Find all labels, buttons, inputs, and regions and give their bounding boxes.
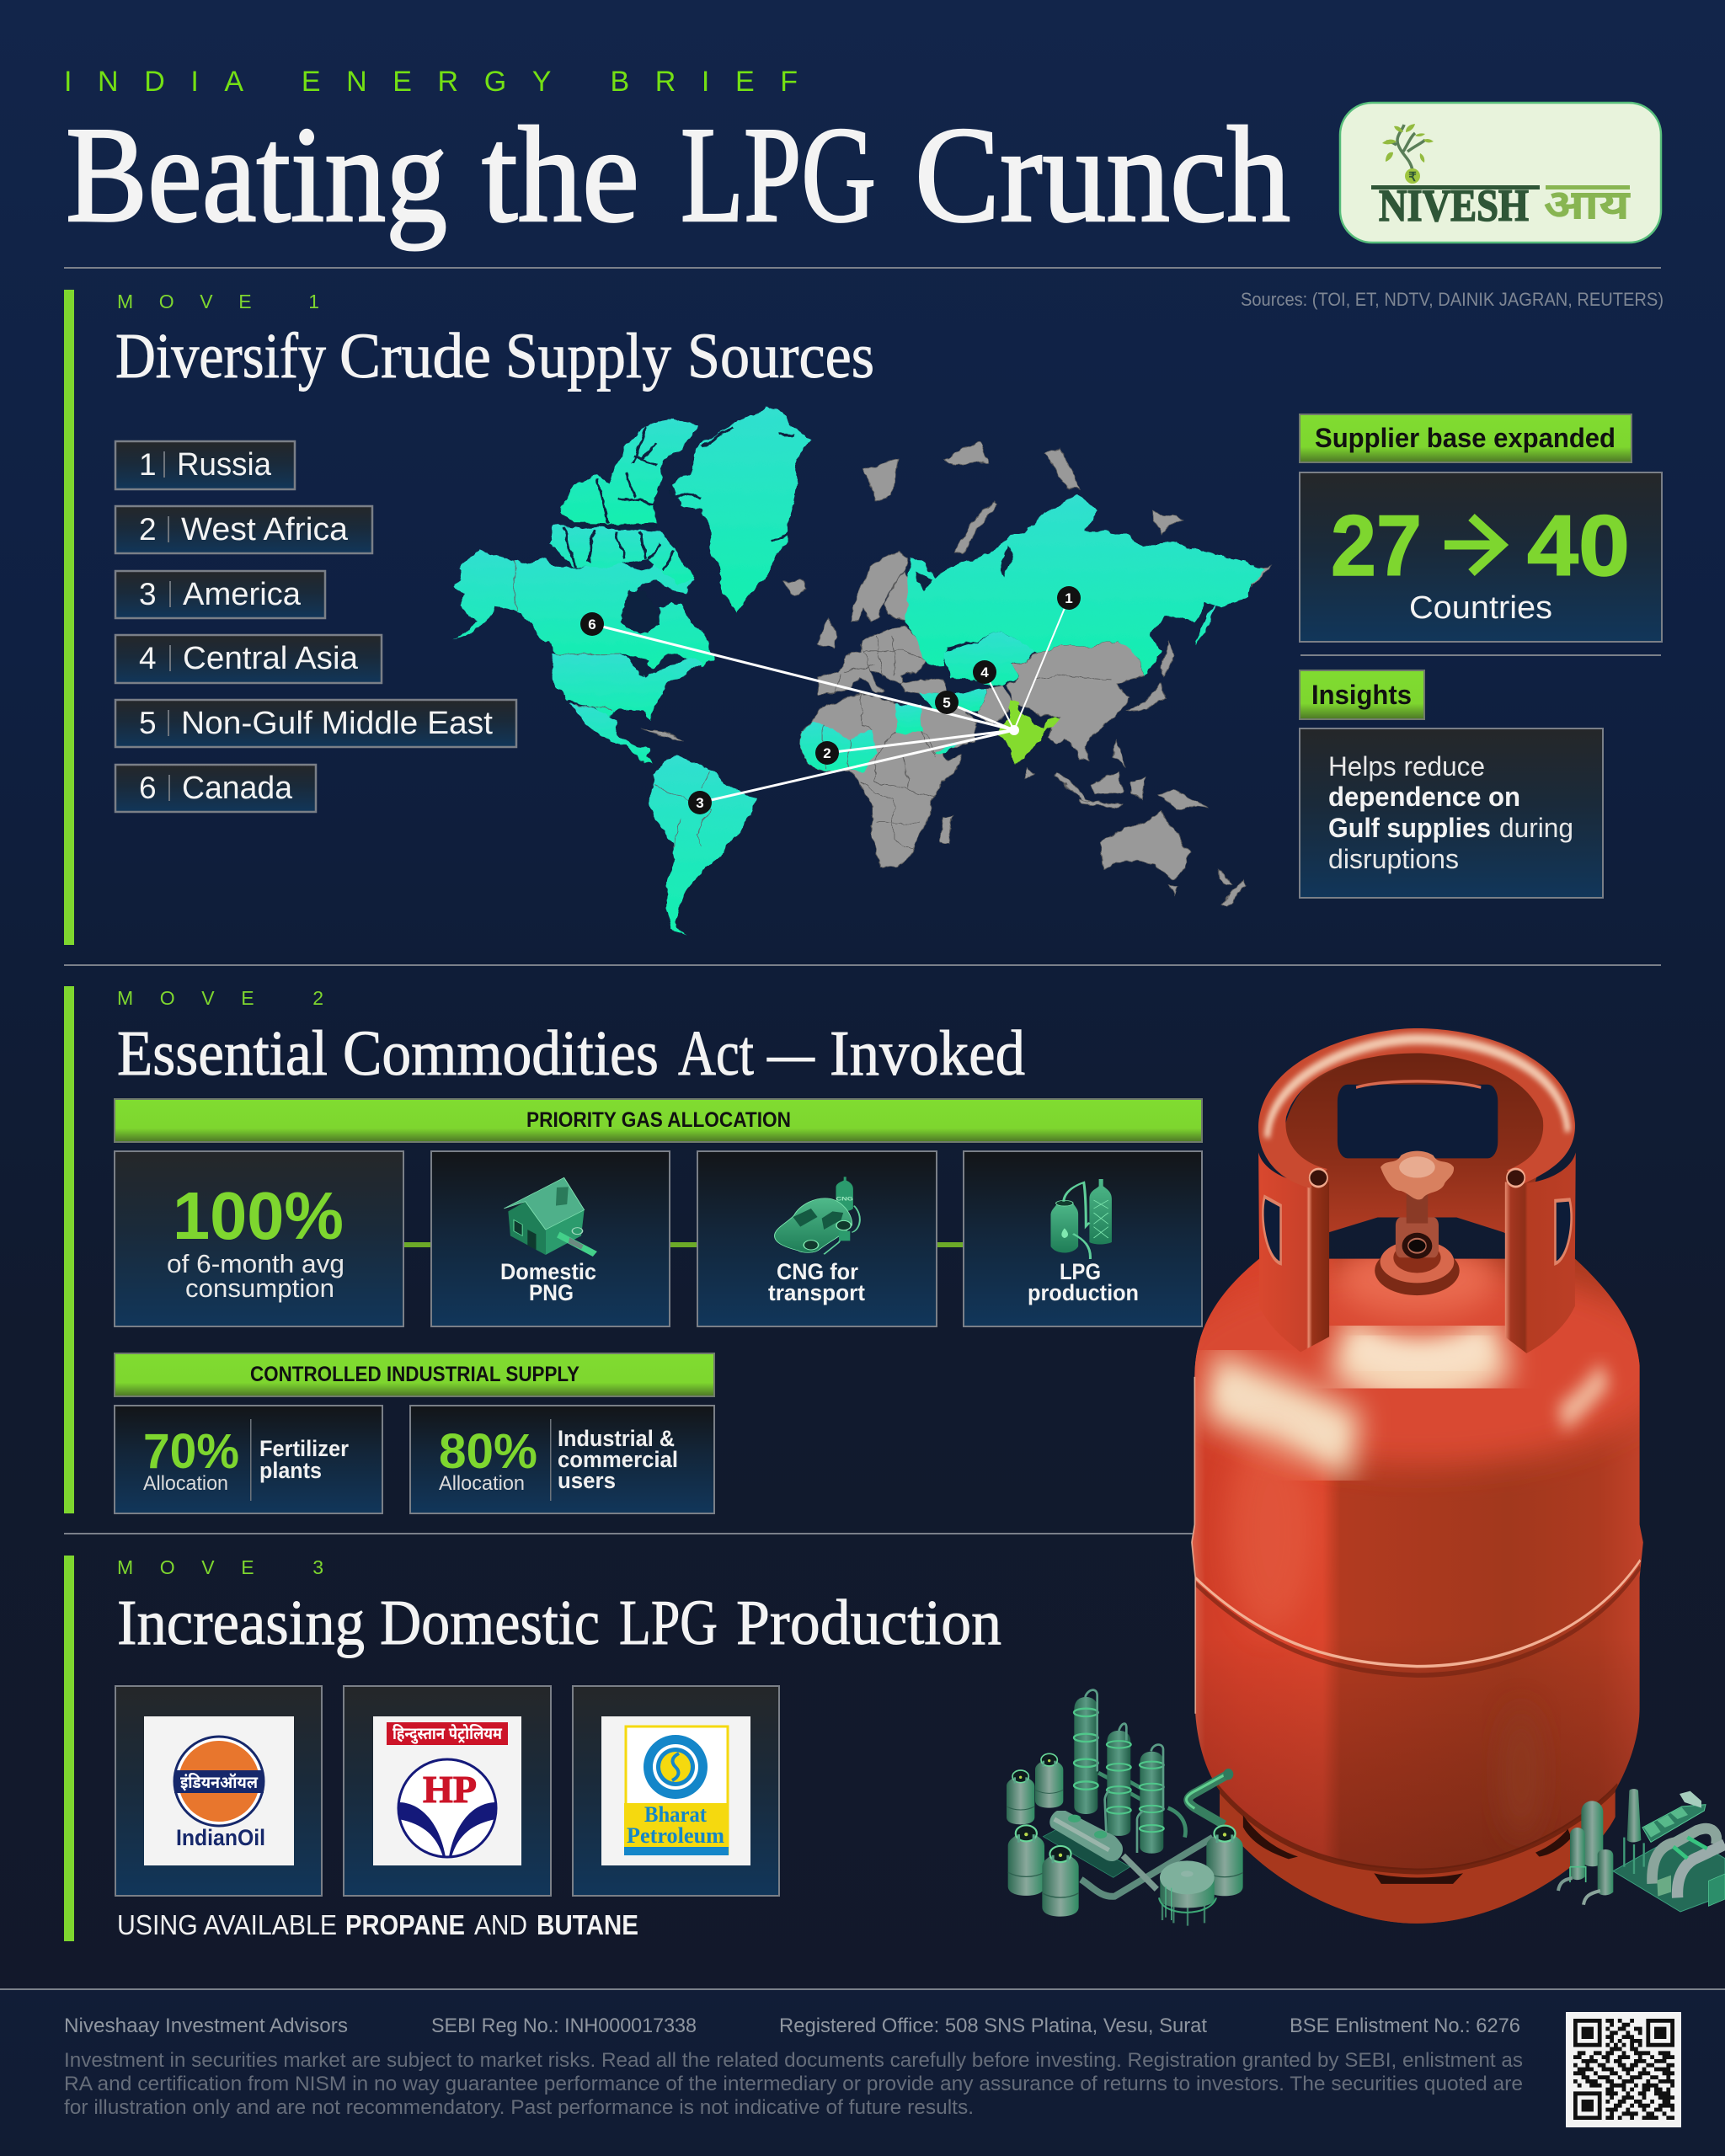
propane and butane note: BUTANE (537, 1909, 638, 1940)
node 4 (973, 660, 996, 684)
list item: Non-Gulf Middle East (115, 700, 516, 747)
card: 70 percent: Allocation (143, 1472, 228, 1495)
cylinder handle collar (1258, 1028, 1576, 1353)
node 6: 6 (588, 616, 596, 632)
move 3 heading: Production (736, 1588, 1001, 1658)
supplier base tag (1300, 414, 1632, 462)
node 3: 3 (696, 795, 704, 811)
card: 70 percent: 70% (143, 1424, 239, 1479)
footer disclaimer (64, 2049, 1523, 2119)
list item: West Africa (115, 506, 372, 553)
controlled supply banner: CONTROLLED INDUSTRIAL SUPPLY (250, 1363, 579, 1386)
footer details: Registered Office: 508 SNS Platina, Vesu, Surat (779, 2015, 1207, 2037)
insights card: Helps reduce (1328, 751, 1485, 782)
move 3 label: MOVE 3 (117, 1556, 323, 1578)
insights card: disruptions (1328, 844, 1459, 874)
insights card: during (1499, 813, 1573, 843)
main title: the (482, 99, 639, 251)
card: 70 percent: plants (259, 1458, 322, 1483)
footer disclaimer: for illustration only and are not recommendatory. Past performance is not indicative of future results. (64, 2096, 974, 2119)
logo wordmark: NIVESH (1379, 180, 1529, 231)
card: 70 percent (115, 1406, 382, 1513)
move 3 heading: LPG (619, 1588, 718, 1658)
controlled supply banner (115, 1353, 714, 1396)
move 3 heading: Domestic (380, 1588, 600, 1658)
card: 100 percent (115, 1151, 403, 1326)
route lines (592, 598, 1069, 803)
LPG cylinder illustration (1191, 1028, 1643, 1924)
move 3 heading: Increasing (117, 1588, 365, 1658)
card: 80 percent (410, 1406, 714, 1513)
priority banner (115, 1099, 1202, 1142)
list item: Canada: 6 (139, 771, 157, 805)
card: 80 percent: commercial (558, 1447, 678, 1472)
card: LPG production (964, 1151, 1202, 1326)
list item: West Africa: West Africa (181, 512, 349, 547)
list item: Canada (115, 765, 316, 812)
card: domestic PNG: Domestic (500, 1259, 596, 1284)
list item: Non-Gulf Middle East: Non-Gulf Middle East (181, 706, 493, 741)
list item: West Africa: 2 (139, 512, 157, 547)
panel: move 3 (64, 1556, 1001, 1941)
card: HP logo: HP (423, 1768, 477, 1811)
node 5: 5 (943, 695, 951, 711)
panel: move 2 (64, 986, 1202, 1513)
list item: America (115, 571, 325, 618)
propane and butane note: AND (474, 1909, 527, 1940)
node 4: 4 (980, 664, 989, 680)
insights card: Gulf supplies (1328, 813, 1491, 843)
footer details: BSE Enlistment No.: 6276 (1290, 2015, 1520, 2037)
list item: America: America (183, 577, 302, 612)
list item: America: 3 (139, 577, 157, 611)
list item: Russia: 1 (139, 447, 157, 482)
move 2 heading: Essential (117, 1018, 328, 1089)
QR code (1566, 2012, 1681, 2127)
move 3 heading (117, 1588, 1001, 1658)
card: CNG for transport: CNG for (777, 1259, 858, 1284)
footer details: Niveshaay Investment Advisors (64, 2015, 348, 2037)
node 1: 1 (1065, 590, 1073, 606)
footer background (0, 1989, 1725, 2156)
supplier count card: Countries (1409, 590, 1552, 626)
footer details: SEBI Reg No.: INH000017338 (431, 2015, 697, 2037)
card: 100 percent: 100% (173, 1178, 344, 1253)
card: LPG production: LPG (1060, 1259, 1101, 1284)
move 1 heading: Diversify (115, 321, 326, 392)
Niveshaay logo badge (1340, 103, 1661, 243)
move 1 heading (115, 321, 874, 392)
card: 80 percent: 80% (439, 1424, 537, 1479)
move 2 heading: Invoked (830, 1018, 1025, 1089)
cylinder valve (1375, 1151, 1460, 1295)
card: Bharat Petroleum logo (573, 1686, 779, 1896)
insights tag (1300, 670, 1424, 719)
supplier list (115, 441, 516, 812)
card: IndianOil logo (115, 1686, 322, 1896)
logo Hindi wordmark: आय (1543, 181, 1631, 228)
supplier count card: 27 (1331, 498, 1422, 594)
move 2 heading: Act (678, 1018, 754, 1089)
node 1 (1057, 586, 1081, 610)
card: domestic PNG (431, 1151, 670, 1326)
main title (66, 99, 1290, 251)
card: IndianOil logo: इंडियनऑयल (180, 1772, 259, 1792)
country borders (832, 636, 1112, 847)
icon: car and CNG tank: CNG (836, 1196, 853, 1202)
card: HP logo: हिन्दुस्तान पेट्रोलियम (393, 1723, 503, 1744)
card: domestic PNG: PNG (529, 1280, 574, 1305)
supplier count card (1300, 472, 1662, 642)
sources: Sources: (TOI, ET, NDTV, DAINIK JAGRAN, REUTERS) (1241, 289, 1664, 310)
list item: Non-Gulf Middle East: 5 (139, 706, 157, 740)
card: 70 percent: Fertilizer (259, 1436, 349, 1461)
icon: car and CNG tank (775, 1177, 860, 1254)
origin point (1009, 725, 1019, 735)
list item: Russia (115, 441, 295, 489)
connectors (403, 1242, 964, 1247)
move 2 label: MOVE 2 (117, 987, 323, 1009)
node 3 (688, 791, 712, 814)
logo tree: ₹ (1408, 170, 1417, 184)
card: IndianOil logo: IndianOil (176, 1825, 265, 1850)
list item: Russia: Russia (177, 447, 272, 483)
panel: move 1 (64, 289, 1664, 945)
card: 80 percent: Allocation (439, 1472, 525, 1495)
footer disclaimer: Investment in securities market are subject to market risks. Read all the related documents carefully before investing. Registration granted by SEBI, enlistment as (64, 2049, 1523, 2072)
main title: LPG (681, 99, 876, 251)
India (997, 700, 1060, 766)
list item: Canada: Canada (182, 771, 293, 806)
card: CNG for transport: transport (768, 1280, 865, 1305)
list item: Central Asia: 4 (139, 641, 157, 675)
move 1 heading: Supply (505, 321, 671, 392)
move 2 heading (117, 1018, 1025, 1089)
list item: Central Asia: Central Asia (183, 641, 359, 676)
move 1 label: MOVE 1 (117, 291, 319, 312)
card: 80 percent: Industrial & (558, 1426, 675, 1451)
node 2 (815, 741, 839, 765)
footer disclaimer: RA and certification from NISM in no way guarantee performance of the intermediary or provide any assurance of returns to investors. The securities quoted are (64, 2073, 1523, 2095)
highlighted supplier regions (453, 407, 1265, 935)
card: Bharat Petroleum logo: Bharat (644, 1802, 707, 1827)
insights card (1300, 728, 1603, 898)
move 2 heading: — (766, 1018, 815, 1089)
card: 100 percent: of 6-month avg (167, 1249, 344, 1278)
card: HP logo (344, 1686, 551, 1896)
refinery illustration right (1558, 1789, 1725, 1912)
cylinder body (1191, 1258, 1643, 1924)
logo tree (1382, 124, 1434, 184)
card: LPG production: production (1028, 1280, 1139, 1305)
refinery illustration left (1007, 1690, 1243, 1926)
main title: Beating (66, 99, 447, 251)
node 2: 2 (823, 745, 831, 761)
list item: Central Asia (115, 635, 382, 683)
supplier base tag: Supplier base expanded (1315, 423, 1616, 453)
supplier count card: 40 (1527, 498, 1630, 594)
propane and butane note: USING AVAILABLE (117, 1909, 337, 1940)
icon: house with pipe (504, 1177, 597, 1257)
propane and butane note (117, 1909, 638, 1940)
insights card: dependence on (1328, 782, 1520, 812)
move 2 heading: Commodities (343, 1018, 659, 1089)
grey land (641, 440, 1271, 906)
move 1 heading: Sources (687, 321, 874, 392)
arrow (1445, 517, 1502, 573)
move 1 heading: Crude (339, 321, 491, 392)
card: 100 percent: consumption (185, 1273, 334, 1303)
insights tag: Insights (1311, 680, 1412, 710)
header eyebrow: INDIA ENERGY BRIEF (64, 66, 798, 98)
node 6 (580, 612, 604, 636)
sea cuts in highlighted regions (622, 544, 1013, 676)
main title: Crunch (915, 99, 1290, 251)
card: 80 percent: users (558, 1468, 616, 1493)
icon: LPG plant (1050, 1179, 1112, 1259)
footer details (64, 2015, 1520, 2037)
card: Bharat Petroleum logo: Petroleum (627, 1823, 724, 1848)
card: CNG for transport (697, 1151, 937, 1326)
priority banner: PRIORITY GAS ALLOCATION (526, 1108, 791, 1132)
node 5 (935, 691, 959, 714)
propane and butane note: PROPANE (345, 1909, 465, 1940)
world map (453, 407, 1271, 935)
